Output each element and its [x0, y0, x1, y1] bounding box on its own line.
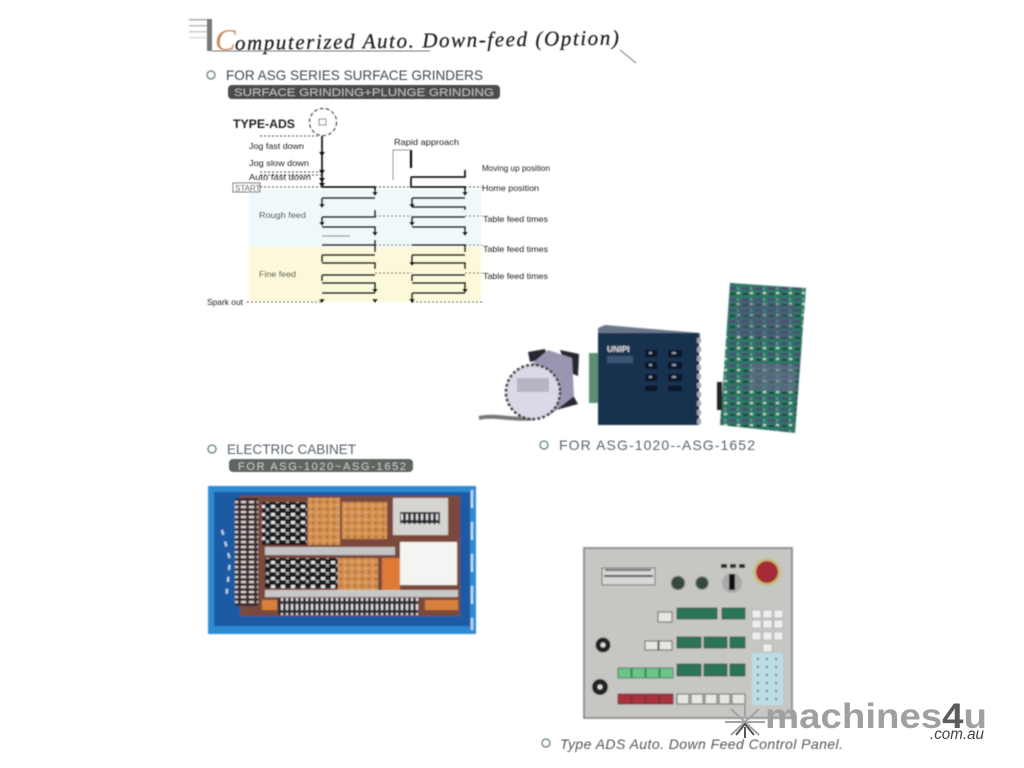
lower chip band: [749, 363, 797, 392]
orange strip: [425, 600, 458, 610]
type label: TYPE-ADS: [233, 119, 295, 131]
body: [522, 350, 574, 415]
left dials: [592, 638, 610, 695]
orange module 3: [338, 558, 378, 590]
terminal block: [589, 353, 599, 403]
icon: dial: [310, 108, 336, 136]
rapid approach: [393, 137, 459, 180]
flange corners: [528, 349, 579, 410]
lower relays: [265, 558, 338, 588]
image: driver unit: [589, 325, 700, 425]
icon: title bracket: [189, 19, 212, 51]
title: [189, 19, 636, 63]
right fins: [697, 338, 701, 425]
selector marks: [721, 564, 745, 568]
caption: ASG-1020 to 1652: FOR ASG-1020--ASG-1652: [559, 437, 755, 453]
connector: [717, 382, 722, 410]
board terminals: [400, 512, 440, 524]
watermark: machines4u: [725, 697, 987, 743]
image: stepper motor: [479, 349, 579, 419]
white buttons lower: [677, 694, 745, 704]
frame highlight: [471, 490, 473, 630]
orange module 4: [382, 558, 400, 590]
fine feed zone: [249, 247, 481, 302]
display row 2: [677, 637, 745, 648]
left labels: Jog fast down: [249, 141, 304, 151]
rapid approach: Rapid approach: [394, 137, 459, 147]
left blue mottling: [222, 530, 230, 600]
image: circuit board: [717, 283, 806, 433]
caption: control panel: Type ADS Auto. Down Feed Control Panel.: [560, 736, 843, 752]
orange module 1: [308, 498, 340, 545]
left labels: Spark out: [207, 297, 244, 307]
white buttons upper: [645, 612, 672, 650]
domain: .com.au: [930, 726, 984, 743]
face label: [517, 378, 549, 392]
red buttons: [618, 694, 673, 704]
pill: cabinet models: FOR ASG-1020~ASG-1652: [238, 461, 406, 473]
gray rail 2: [265, 590, 458, 597]
selector switch: [722, 573, 742, 593]
terminal strip: [235, 498, 258, 606]
frame: [208, 486, 476, 634]
right labels: Home position: [482, 183, 539, 193]
right labels: Moving up position: [482, 163, 550, 173]
upper relays: [262, 502, 307, 545]
right labels: Table feed times: [483, 244, 548, 254]
dotted guides: [247, 136, 482, 302]
chart: ADS feed cycle diagram: [207, 108, 550, 307]
emergency stop: [753, 558, 781, 586]
left labels: Rough feed: [259, 210, 306, 220]
vent marks: [649, 352, 676, 378]
right labels: Table feed times: [483, 214, 548, 224]
print: [607, 356, 633, 363]
rough feed zone: [249, 190, 481, 247]
brand name: machines 4u: [765, 697, 987, 736]
heading: electric cabinet: ELECTRIC CABINET: [227, 441, 356, 457]
case: [598, 333, 699, 425]
top edge: [598, 325, 700, 338]
vertical axis: [321, 136, 323, 187]
left labels: Auto fast down: [249, 172, 311, 182]
right traverse path: [411, 170, 465, 300]
slot display: [602, 568, 655, 585]
green buttons: [618, 668, 673, 678]
title words: omputerized Auto. Down-feed (Option): [235, 26, 619, 55]
upper chip band: [735, 300, 795, 340]
top knobs: [671, 576, 708, 590]
title underline: [212, 50, 636, 63]
terminal row: [278, 598, 418, 615]
left labels: [207, 141, 311, 307]
faint return line: [322, 235, 350, 237]
motor face: [506, 365, 560, 419]
right labels: [482, 163, 550, 281]
white module: [400, 542, 457, 585]
left labels: Jog slow down: [249, 158, 309, 168]
start box: START: [235, 184, 261, 193]
gray rail 1: [265, 547, 395, 555]
arrow ticks: [319, 152, 468, 303]
pill: grinding types: [228, 85, 500, 99]
panel plate: [584, 548, 792, 718]
left traverse path: [322, 187, 375, 293]
orange module 2: [342, 502, 387, 539]
left labels: Fine feed: [259, 269, 296, 279]
inner back plate: [214, 492, 470, 626]
control board: [393, 498, 448, 535]
inner panel: [240, 496, 460, 616]
image: electric cabinet: [208, 486, 476, 634]
display row 1: [677, 608, 745, 619]
brand: UNIPI: [607, 344, 630, 354]
image: control panel: [584, 548, 792, 718]
pill: grinding types: SURFACE GRINDING+PLUNGE GRINDING: [234, 87, 494, 99]
blue indicator area: [752, 653, 783, 705]
title initial: C: [215, 22, 236, 57]
right labels: Table feed times: [483, 271, 548, 281]
left orange strip: [262, 600, 277, 610]
keypad: [752, 610, 783, 652]
display row 3: [677, 664, 745, 676]
cable: [479, 417, 534, 419]
heading: ASG series: FOR ASG SERIES SURFACE GRINDERS: [226, 67, 483, 83]
icon: star arrow: [725, 705, 765, 738]
vent slots: [645, 350, 682, 391]
